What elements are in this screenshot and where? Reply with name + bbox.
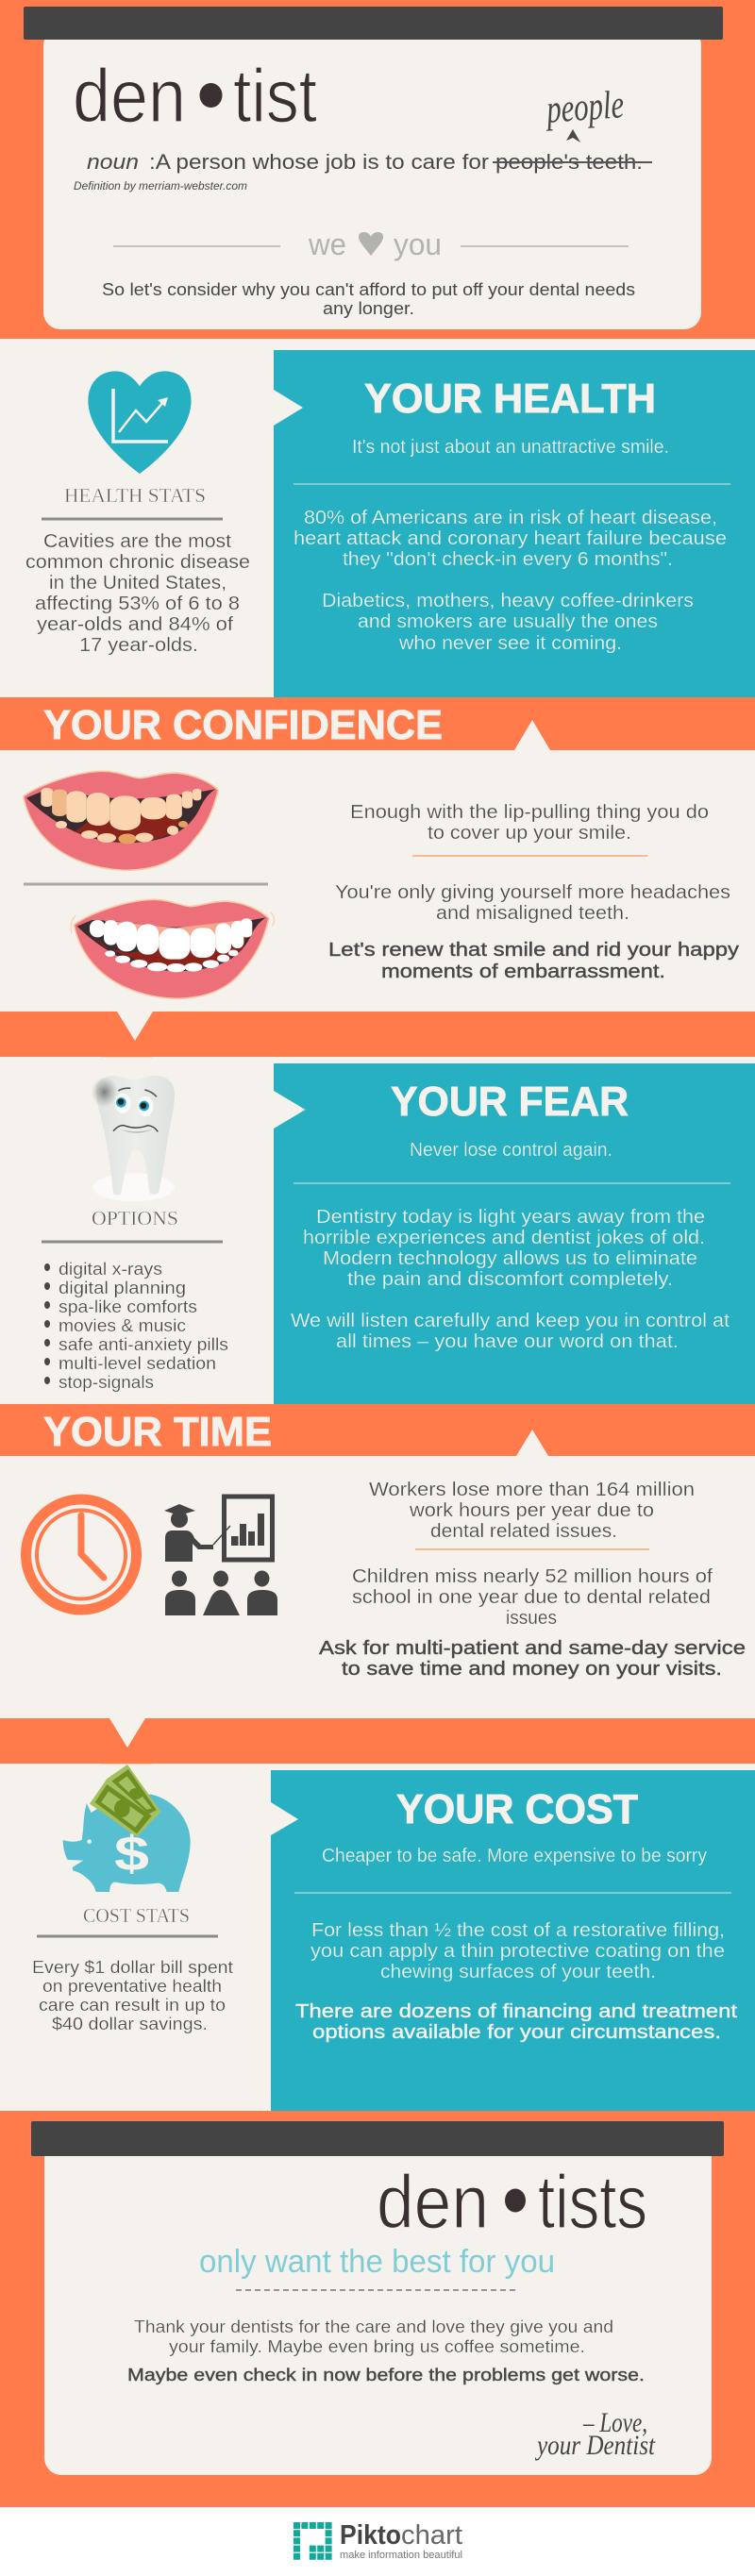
definition text: :A person whose job is to care for	[149, 150, 489, 174]
text: health body: who never see it coming.	[398, 633, 622, 654]
panel: intro definition card	[0, 0, 755, 339]
heading: your confidence: YOUR CONFIDENCE	[43, 702, 443, 748]
text: cost stats body: on preventative health	[42, 1977, 222, 1996]
logo: piktochart	[294, 2520, 462, 2561]
text: health stats body: in the United States,	[49, 573, 226, 594]
we love you divider: you	[394, 227, 442, 261]
subheading: It's not just about an unattractive smile.	[352, 437, 669, 458]
text: cost body: options available for your circumstances.	[312, 2022, 721, 2043]
text: time body: to save time and money on your visits.	[342, 1659, 722, 1680]
list: options: digital x-rays	[59, 1260, 162, 1279]
text: closing message: Maybe even check in now before the problems get worse.	[127, 2366, 645, 2384]
text: cost body: There are dozens of financing and treatment	[295, 2001, 738, 2022]
signature: your Dentist	[534, 2430, 656, 2461]
heading: your time: YOUR TIME	[43, 1409, 272, 1455]
signature	[534, 2407, 656, 2461]
logo: piktochart: make information beautiful	[340, 2550, 462, 2561]
icon: piggy bank with money	[63, 1765, 191, 1892]
divider band with down arrow	[0, 1718, 755, 1764]
illustration: stained teeth mouth	[24, 771, 218, 870]
text: health stats body: affecting 53% of 6 to 8	[35, 594, 240, 614]
text: time body: Ask for multi-patient and same-day service	[319, 1638, 746, 1659]
subheading: Never lose control again.	[410, 1140, 612, 1161]
text: fear body: Modern technology allows us to eliminate	[323, 1248, 697, 1269]
text: time body: issues	[506, 1608, 557, 1629]
text: health body: heart attack and coronary heart failure because	[294, 528, 727, 549]
list: options: stop-signals	[59, 1373, 154, 1392]
text: confidence body: and misaligned teeth.	[436, 903, 629, 924]
list: options: digital planning	[59, 1279, 186, 1297]
text: confidence body: Enough with the lip-pulling thing you do	[350, 802, 709, 823]
heading: your fear: YOUR FEAR	[391, 1079, 629, 1125]
title: den tists: tists	[538, 2160, 647, 2244]
text: cost body: you can apply a thin protective coating on the	[310, 1941, 725, 1962]
text: cost stats body: care can result in up to	[39, 1996, 226, 2015]
heading: your health: YOUR HEALTH	[364, 376, 656, 422]
heading: cost stats: COST STATS	[83, 1904, 190, 1927]
title: den tist: den	[73, 54, 186, 138]
text: closing message	[127, 2317, 645, 2384]
signature: – Love,	[582, 2407, 647, 2438]
text: health stats body: Cavities are the most	[43, 531, 231, 552]
text: fear body: all times – you have our word on that.	[336, 1331, 679, 1352]
heading: options: OPTIONS	[92, 1207, 178, 1229]
text: cost body	[295, 1920, 738, 2043]
logo: piktochart: chart	[401, 2520, 462, 2551]
we love you divider: we	[308, 227, 346, 261]
logo: piktochart: Pikto	[340, 2520, 401, 2551]
text: closing message: your family. Maybe even bring us coffee sometime.	[169, 2337, 585, 2356]
text: health stats body: year-olds and 84% of	[37, 614, 233, 635]
handwritten correction: people	[543, 83, 626, 142]
list: options	[44, 1260, 228, 1392]
text: fear body: horrible experiences and dentist jokes of old.	[303, 1228, 705, 1248]
text: health stats body	[25, 531, 250, 656]
text: confidence body: moments of embarrassment.	[381, 962, 665, 982]
text: cost stats body	[32, 1958, 233, 2033]
text: confidence body: You're only giving yourself more headaches	[335, 882, 730, 903]
panel: your health	[274, 350, 755, 697]
handwritten correction: people: people	[543, 83, 626, 132]
tagline: only want the best for you	[199, 2244, 555, 2280]
icon: heart with chart	[88, 371, 192, 474]
text: fear body: Dentistry today is light years away from the	[316, 1207, 705, 1228]
panel: your time header band	[0, 1404, 755, 1456]
text: fear body	[291, 1207, 730, 1352]
intro sentence: any longer.	[323, 299, 414, 318]
text: cost stats body: Every $1 dollar bill spent	[32, 1958, 233, 1977]
icon: clock	[26, 1499, 136, 1610]
text: cost stats body: $40 dollar savings.	[52, 2015, 208, 2033]
text: confidence body: Let's renew that smile and rid your happy	[328, 940, 739, 961]
subheading: Cheaper to be safe. More expensive to be sorry	[322, 1846, 707, 1866]
text: health body: 80% of Americans are in risk of heart disease,	[304, 508, 717, 528]
text: health body: and smokers are usually the ones	[358, 611, 658, 632]
heading: health stats: HEALTH STATS	[64, 484, 206, 507]
title: den tists	[377, 2160, 647, 2244]
divider band with down arrow	[0, 1012, 755, 1057]
text: fear body: the pain and discomfort completely.	[347, 1269, 673, 1290]
text: time body: Children miss nearly 52 million hours of	[352, 1566, 713, 1587]
title: den tist	[73, 54, 317, 138]
text: closing message: Thank your dentists for the care and love they give you and	[134, 2317, 613, 2336]
definition text	[87, 150, 652, 174]
panel: closing card	[0, 2111, 755, 2507]
title: den tist: tist	[233, 54, 317, 138]
icon: teacher with students	[164, 1497, 277, 1615]
text: cost body: For less than ½ the cost of a restorative filling,	[311, 1920, 725, 1941]
text: fear body: We will listen carefully and keep you in control at	[291, 1311, 730, 1331]
source note: Definition by merriam-webster.com	[74, 179, 247, 192]
text: health body: they "don't check-in every 6 months".	[343, 549, 673, 570]
intro sentence: So let's consider why you can't afford to put off your dental needs	[102, 280, 635, 299]
text: confidence body: to cover up your smile.	[428, 823, 631, 844]
text: time body: school in one year due to dental related	[352, 1587, 711, 1608]
definition text: people's teeth.	[495, 150, 643, 174]
text: confidence body	[328, 802, 739, 982]
heading: your cost: YOUR COST	[396, 1786, 638, 1832]
definition text: noun	[87, 150, 139, 174]
illustration: worried tooth	[92, 1076, 175, 1201]
title: den tists: den	[377, 2160, 489, 2244]
panel: your cost	[271, 1770, 755, 2111]
we love you divider	[113, 227, 629, 261]
list: options: movies & music	[59, 1316, 186, 1335]
text: health stats body: common chronic disease	[25, 552, 250, 573]
list: options: spa-like comforts	[59, 1297, 197, 1316]
text: health body: Diabetics, mothers, heavy coffee-drinkers	[322, 591, 694, 611]
text: time body: dental related issues.	[430, 1521, 617, 1542]
icon: piggy bank with money: $	[114, 1827, 149, 1882]
text: health stats body: 17 year-olds.	[79, 635, 198, 656]
illustration: healthy white teeth mouth	[71, 899, 274, 998]
panel: your confidence header band	[0, 697, 755, 750]
panel: your fear	[274, 1063, 755, 1404]
list: options: safe anti-anxiety pills	[59, 1335, 228, 1354]
list: options: multi-level sedation	[59, 1354, 216, 1373]
text: cost body: chewing surfaces of your teeth.	[380, 1962, 656, 1982]
text: time body	[319, 1480, 746, 1680]
text: time body: Workers lose more than 164 million	[369, 1480, 695, 1500]
text: time body: work hours per year due to	[409, 1500, 654, 1521]
text: health body	[294, 508, 727, 654]
intro sentence	[102, 280, 635, 318]
